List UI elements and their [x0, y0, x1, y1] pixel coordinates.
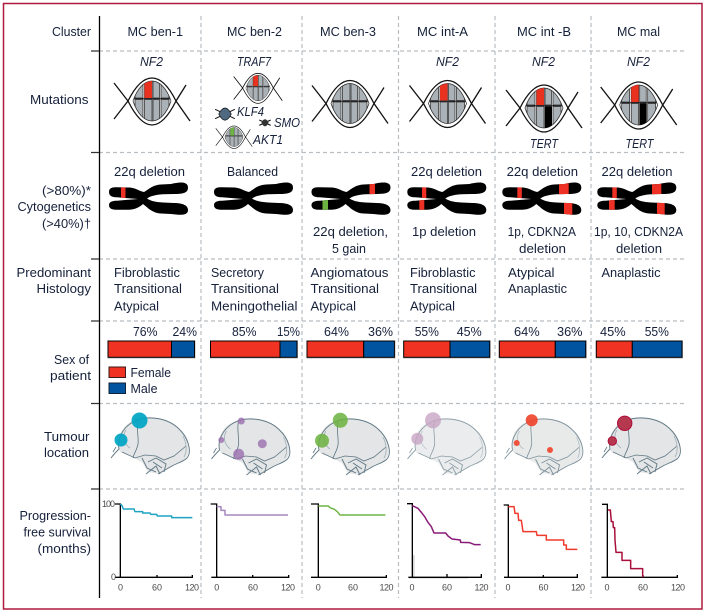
- survival chart ben-3: 120: [380, 583, 394, 593]
- histology ben-1: Atypical: [114, 300, 159, 314]
- cytogenetics int-A: [407, 165, 486, 239]
- histology int-A: Fibroblastic: [410, 266, 476, 280]
- cluster name: MC mal: MC mal: [617, 25, 660, 39]
- sex bar int-B: [499, 325, 587, 358]
- cytogenetics ben-1: 22q deletion: [114, 165, 185, 179]
- cytogenetics mal: [594, 165, 684, 256]
- mutation int-B: NF2: [532, 55, 555, 69]
- cytogenetics int-B: [502, 165, 581, 256]
- legend: Female: [130, 366, 171, 380]
- label: Cluster: Cluster: [52, 25, 91, 39]
- label: histology: Histology: [36, 282, 92, 296]
- cytogenetics int-A: 22q deletion: [411, 165, 482, 179]
- row: cytogenetics: [18, 165, 684, 256]
- survival chart ben-1: [102, 499, 199, 593]
- label: histology: [16, 266, 92, 296]
- sex bar mal: 55%: [645, 325, 669, 339]
- histology ben-2: Transitional: [211, 282, 279, 296]
- survival chart ben-2: 120: [281, 583, 295, 593]
- survival chart int-B: 0: [506, 583, 511, 593]
- skull ben-1: [111, 412, 189, 474]
- label: Mutations: Mutations: [30, 93, 88, 107]
- mutation ben-1: [114, 55, 190, 125]
- label: progression-free survival: [20, 509, 91, 556]
- histology ben-3: Transitional: [310, 282, 379, 296]
- survival chart ben-1: 120: [185, 583, 199, 593]
- sex bar ben-2: 85%: [232, 325, 256, 339]
- sex bar ben-3: 64%: [324, 325, 349, 339]
- histology ben-2: [211, 266, 298, 314]
- skull int-A: [408, 412, 486, 475]
- legend: [109, 366, 171, 396]
- mutation ben-3: [312, 80, 388, 128]
- histology int-B: Anaplastic: [508, 282, 567, 296]
- label: histology: Predominant: [16, 266, 92, 280]
- label: tumour location: Tumour: [44, 430, 90, 444]
- mutation int-A: NF2: [436, 55, 459, 69]
- sex bar ben-2: [210, 325, 300, 358]
- cytogenetics ben-2: Balanced: [227, 165, 278, 179]
- survival chart mal: 0: [604, 583, 610, 593]
- label: cytogenetics: [18, 184, 91, 231]
- histology int-A: Atypical: [410, 300, 455, 314]
- cluster name: MC ben-3: MC ben-3: [320, 25, 376, 39]
- mutation ben-2: KLF4: [237, 105, 264, 119]
- histology ben-3: Angiomatous: [310, 266, 388, 280]
- row: cluster: [52, 25, 660, 39]
- label: cytogenetics: (>80%)*: [42, 184, 91, 198]
- survival chart int-B: 120: [571, 583, 585, 593]
- survival chart int-A: [407, 504, 488, 593]
- survival chart ben-1: 100: [102, 499, 115, 509]
- histology ben-1: Fibroblastic: [114, 266, 180, 280]
- survival chart ben-1: 0: [111, 572, 116, 582]
- survival chart ben-2: 0: [214, 583, 219, 593]
- cytogenetics ben-3: 22q deletion,: [313, 225, 388, 239]
- cytogenetics int-B: deletion: [519, 242, 566, 256]
- sex bar mal: 45%: [600, 325, 626, 339]
- sex bar int-A: 55%: [415, 325, 439, 339]
- sex bar int-A: [403, 325, 491, 358]
- sex bar ben-3: 36%: [368, 325, 393, 339]
- skull ben-3: [311, 413, 389, 475]
- label: tumour location: location: [44, 446, 89, 460]
- survival chart ben-1: 60: [152, 583, 162, 593]
- label: sex of patient: Sex of: [54, 353, 90, 367]
- label: cytogenetics: Cytogenetics: [18, 200, 91, 214]
- cluster name: MC ben-2: MC ben-2: [227, 25, 282, 39]
- sex bar ben-2: 15%: [277, 325, 300, 339]
- survival chart int-A: 120: [474, 583, 488, 593]
- mutation mal: NF2: [627, 55, 650, 69]
- cytogenetics ben-3: 5 gain: [332, 242, 366, 256]
- survival chart int-A: 0: [410, 583, 415, 593]
- mutation ben-2: TRAF7: [237, 55, 272, 69]
- histology ben-1: [114, 266, 182, 314]
- histology mal: Anaplastic: [602, 266, 660, 280]
- mutation ben-1: NF2: [140, 55, 163, 69]
- cluster name: MC ben-1: MC ben-1: [128, 25, 183, 39]
- mutation ben-2: AKT1: [252, 133, 283, 147]
- mutation ben-2: [215, 55, 300, 149]
- cytogenetics mal: deletion: [616, 242, 662, 256]
- cluster name: MC int-B: MC int -B: [517, 25, 571, 39]
- row: sex of patient: [50, 325, 683, 396]
- cytogenetics ben-3: [312, 181, 390, 256]
- mutation int-A: [410, 55, 486, 128]
- mutation ben-2: SMO: [274, 116, 300, 130]
- cluster name: MC int-A: MC int-A: [417, 25, 469, 39]
- sex bar int-B: 36%: [557, 325, 582, 339]
- label: sex of patient: patient: [50, 369, 92, 383]
- sex bar ben-1: [108, 325, 197, 358]
- histology int-B: Atypical: [508, 266, 554, 280]
- histology int-A: Transitional: [410, 282, 477, 296]
- cytogenetics mal: 1p, 10, CDKN2A: [594, 225, 684, 239]
- survival chart ben-2: [211, 504, 295, 593]
- label: progression-free survival: Progression-: [20, 509, 91, 523]
- label: sex of patient: [50, 353, 92, 383]
- survival chart int-B: 60: [538, 583, 549, 593]
- cytogenetics int-A: 1p deletion: [412, 225, 476, 239]
- survival chart ben-1: 0: [118, 583, 123, 593]
- sex bar int-A: 45%: [457, 325, 482, 339]
- skull int-B: [504, 414, 583, 475]
- sex bar mal: [596, 325, 683, 358]
- survival chart ben-3: 0: [316, 583, 321, 593]
- legend: Male: [130, 382, 158, 396]
- histology ben-2: Meningothelial: [211, 300, 298, 314]
- histology ben-3: [310, 266, 388, 314]
- cytogenetics int-B: 22q deletion: [507, 165, 578, 179]
- row: tumour location: [44, 412, 680, 475]
- survival chart mal: 60: [638, 583, 648, 593]
- row: predominant histology: [16, 266, 660, 314]
- histology int-B: [508, 266, 567, 296]
- cytogenetics ben-1: [109, 165, 188, 215]
- mutation int-B: [506, 55, 582, 151]
- sex bar ben-1: 76%: [133, 325, 158, 339]
- survival chart ben-2: 60: [248, 583, 258, 593]
- label: progression-free survival: (months): [38, 542, 91, 556]
- sex bar ben-1: 24%: [172, 325, 197, 339]
- survival chart ben-3: 60: [348, 583, 358, 593]
- label: progression-free survival: free survival: [24, 526, 91, 540]
- mutation int-B: TERT: [530, 137, 559, 151]
- sex bar ben-3: [306, 325, 396, 358]
- skull mal: [602, 416, 680, 474]
- cytogenetics ben-2: [214, 165, 293, 215]
- sex bar int-B: 64%: [514, 325, 540, 339]
- histology int-A: [410, 266, 477, 314]
- cytogenetics mal: 22q deletion: [602, 165, 673, 179]
- histology ben-1: Transitional: [114, 282, 182, 296]
- label: tumour location: [44, 430, 90, 460]
- survival chart mal: 120: [671, 583, 685, 593]
- skull ben-2: [212, 418, 290, 475]
- histology ben-3: Atypical: [310, 300, 356, 314]
- survival chart int-B: [504, 505, 585, 593]
- survival chart ben-3: [311, 504, 394, 593]
- row: mutations: [30, 55, 677, 151]
- mutation mal: TERT: [626, 137, 655, 151]
- survival chart mal: [601, 504, 685, 593]
- histology ben-2: Secretory: [211, 266, 265, 280]
- label: cytogenetics: (>40%)†: [42, 217, 91, 231]
- row: progression-free survival: [20, 499, 685, 593]
- cytogenetics int-B: 1p, CDKN2A: [508, 225, 577, 239]
- mutation mal: [601, 55, 677, 151]
- survival chart int-A: 60: [442, 583, 452, 593]
